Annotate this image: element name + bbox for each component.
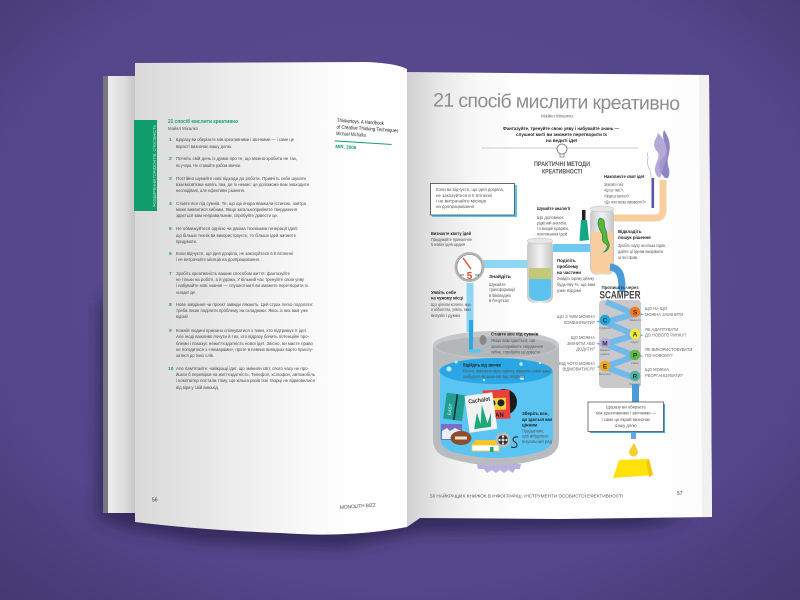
label: quota [431,231,473,247]
label: inspiration: в Вікіпедіях [489,293,512,298]
left page heading: Майкл Міхалко [168,125,198,132]
SCAMPER questions: left side: ДОДАТИ? [576,346,596,352]
text block: ten numbered tips: 1 [169,137,172,143]
subheading [534,162,590,176]
text block: ten numbered tips: і набувайте нові знання — слушної миті ви зможете перетворити їх [176,282,308,289]
icon: Cachalot book: Cachalot [468,397,491,406]
book reference block: MIR, 2006 [335,144,357,151]
icon: red poster: MAN [490,413,504,419]
SCAMPER letter: S: Замінити [629,318,641,322]
text block: ten numbered tips: блеми і показує нежиттєздатність нової ідеї. Звісно, ви маєте право [176,341,313,347]
SCAMPER letter: M [600,338,611,356]
label: find the solution [618,229,666,260]
icon: pressure gauge: 5 [467,271,473,282]
footer: MONOLITH BIZZ: MONOLITH BIZZ [340,502,376,511]
label: divide the problem: на частини [557,270,581,275]
SCAMPER letter: P [630,350,640,365]
SCAMPER questions: left side: ВІД ЧОГО МОЖНА [559,361,595,366]
test tube: divided problem [527,238,553,303]
text block: ten numbered tips: Почніть свій день із думки про те, що можна зробити не так, [176,155,297,162]
SCAMPER questions: right side: ЩО НА ЩО [645,306,667,311]
SCAMPER questions: right side: ЯК ВИКОРИСТОВУВАТИ [645,347,692,352]
text block: ten numbered tips: 9 [169,328,172,334]
label: question everything: Ставте все під сумнів [491,332,539,336]
SCAMPER questions: right side: ПО-НОВОМУ? [645,353,673,358]
label: seek analogies: Шукайте аналогії [537,206,571,211]
text block: ten numbered tips: 5 [169,226,172,232]
label: nurture ideas: «До чого може призвести?» [604,200,647,204]
SCAMPER questions: left side: ЩО МОЖНА [571,335,595,340]
SCAMPER letter: R: Реорган. [629,382,641,386]
SCAMPER letter: S [629,307,641,322]
label: imagine other place: в аббатства, уявіть, яких [431,307,472,312]
SCAMPER questions: left side [557,314,596,372]
panel: green chapter tab: РОЗШИРЕННЯ ГОРИЗОНТІВ: СПОСІБНІСТЬ [152,125,157,207]
label: question everything: хибне, спробуйте це довести [491,350,541,354]
label: collect everything valuable: Придатним, [522,428,544,434]
label: divide the problem: будь-яку %, що вам [557,282,595,287]
text block: ten numbered tips: від віри у свій винахід. [176,384,219,391]
label: divide the problem: уже відомі [557,288,581,293]
left page heading [168,118,239,132]
SCAMPER letter: P: Ужити [631,361,639,365]
text block: ten numbered tips: Не обмежуйтеся однією чи двома техніками генерації ідей: [176,225,298,232]
SCAMPER questions: right side: МОЖНА ЗАМІНИТИ [645,312,683,317]
label: inspiration: в ґенутках [489,298,510,303]
callout: when idea is ripe: Коли ви відчуєте, що ідея дозріла, [436,187,504,192]
SCAMPER letter: A: Адапт. [631,340,639,344]
SCAMPER letter: E: E [603,364,608,370]
lead statement: на ведиті ідеї [546,138,578,144]
text block: ten numbered tips: на ведиті ідеї. [176,290,196,296]
label: collect everything valuable: що здається вам [522,417,552,422]
divider with lightbulb icon [482,144,638,157]
icon: glue tube [580,210,589,241]
label: break the habit: Почніть змінювати якусь навичку, відкрийте новий жанр, [463,368,551,374]
SCAMPER letter: E: Вилучити [599,372,612,376]
label: find the solution: Відкладіть [618,229,642,234]
SCAMPER questions: left side: ВІДМОВИТИСЯ? [562,366,596,372]
SCAMPER questions: right side: РЕОРГАНІЗУВАТИ? [645,373,684,378]
blue pipes [470,248,591,348]
label: break the habit: Відійдіть від звички [463,362,501,368]
text block: ten numbered tips: не тільки на роботі, а й удома. У вільний час тренуйте свою уяву [176,276,304,283]
text block: ten numbered tips: Нове завдання чи проект завжди лякають. Цей страх легко подолати: [176,301,313,308]
text block: ten numbered tips: Постійно шукайте нові підходи до роботи. Привчіть себе шукати [176,175,306,182]
callout: every time you choose [588,402,665,433]
SCAMPER letter: P: P [633,352,638,360]
book reference block: Thinkertoys. A Handbook [337,118,384,127]
title: 21 спосіб мислити креативно [433,90,680,115]
lead statement: слушної миті ви зможете перетворити їх [516,132,607,138]
text block: ten numbered tips: хатися до їхніх слів. [176,353,214,359]
lead statement: Фантазуйте, тренуйте свою уяву і набувайте знань — [503,125,619,132]
label: divide the problem: Знайдіть окрему ділянку [557,276,595,281]
text block: ten numbered tips: вкрасті визначає вашу долю. [176,144,232,150]
icon: green book: EAST [447,403,453,416]
SCAMPER questions: right side: ДО НОВОГО РИНКУ? [645,332,687,338]
icon: film reel [496,432,518,448]
callout: when idea is ripe: і не витрачайте місяців [436,198,487,204]
subheading: ПРАКТИЧНІ МЕТОДИ [534,162,590,168]
scamper cylinder: SCAMPER [600,290,641,302]
label: quota: Придумайте Криналічне [431,237,473,242]
text block: ten numbered tips: Кожній людині приємно спілкуватися з тими, хто підтримує її ідеї. [176,327,307,334]
label: collect everything valuable: щоб вибудувати [522,434,549,438]
callout: every time you choose: вашу долю [615,423,637,428]
label: collect everything valuable [522,411,553,444]
label: nurture ideas: Запитайте себе: [604,182,624,187]
text block: ten numbered tips: Але пам'ятайте: найкращі ідеї, що змінили світ, свого часу не про- [176,365,309,372]
page number 57: 57 [677,491,683,497]
SCAMPER questions: right side [645,306,692,378]
author: Майкл Міхалко [541,112,573,118]
callout: when idea is ripe: не закохуйтеся в її втіленні [436,193,492,198]
text block: ten numbered tips: взаємозв'язки навіть там, де їх немає: це допоможе вам знаходити [176,182,309,188]
book reference block [334,118,399,154]
page number 56: 56 [152,498,158,504]
icon: pressure gauge [454,252,484,282]
text block: ten numbered tips: йшли б перевірки на життєздатність. Телефон, ксілофон, автомобіль [176,371,315,378]
text block: ten numbered tips: треба лише поділити проблему на складники. Якісь із них вам уже [176,308,308,314]
label: divide the problem [557,258,595,293]
text block: ten numbered tips: і комп'ютер постали тому, що кілька разів їхні творці не відмовилися [176,378,315,384]
label: seek analogies: покликання ідей [537,232,568,236]
text block: ten numbered tips: відомі! [176,314,188,320]
panel: green chapter tab [134,120,157,211]
SCAMPER letter: C: Сумісити [599,326,611,330]
icon: yellow book [472,440,500,452]
SCAMPER questions: left side: ЗМІНИТИ АБО [567,341,595,346]
label: imagine other place: Уявіть себе [431,290,457,295]
lead statement [503,125,619,144]
text block: ten numbered tips: 7 [169,271,172,277]
label: imagine other place: на чужому місці [431,296,463,300]
icon: green book [443,393,466,421]
label: collect everything valuable: Зберіть все, [522,411,549,416]
blue pipe from SCAMPER to callout [632,384,639,404]
text block: ten numbered tips: 4 [169,201,172,207]
label: inspiration: Знайдіть [489,274,511,279]
book reference block: Michael Michalko [336,131,366,139]
SCAMPER questions: right side: ЩО МОЖНА [645,367,669,372]
pot: big cauldron [433,320,559,466]
text block: ten numbered tips: Ставте все під сумнів. Те, що ще вчора вважали істиною, завтра [176,201,306,207]
book: open magazine pages [103,62,712,535]
SCAMPER letter: A: A [633,332,638,338]
SCAMPER letter: M: Змінити [600,348,611,352]
book shadow [98,300,690,548]
subheading: КРЕАТИВНОСТІ [542,170,582,176]
SCAMPER letter: E [599,361,612,376]
icon: purple gear under pot [477,464,521,473]
label: collect everything valuable: візуальний ряд [522,439,553,444]
label: break the habit: набудьте враження від творчих [463,374,526,379]
text block: ten numbered tips: 6 [169,251,172,257]
icon: red poster [483,390,511,419]
text block: ten numbered tips: 8 [169,302,172,308]
label: find the solution: дайте ці ідеям визрівати [618,249,664,254]
label: find the solution: Зробіть паузу на кілька годин, [618,243,666,248]
label: find the solution: за їхні справи. [618,255,638,260]
icon: football [450,431,472,445]
text block: ten numbered tips: придумати. [176,240,197,245]
scamper cylinder: Пропишіть через [601,285,639,290]
scamper cylinder [599,285,641,388]
SCAMPER questions: left side: ЩО З ЧИМ МОЖНА [557,314,595,319]
test tube with lizard [590,206,614,275]
SCAMPER letter: C [599,315,611,330]
SCAMPER letter: S: S [633,310,638,316]
label: nurture ideas: «Звідки це взялося?», [604,194,630,198]
left page heading: 21 спосіб мислити креативно [168,118,239,125]
label: imagine other place [431,290,472,318]
SCAMPER letter: R [629,371,641,386]
SCAMPER letter: C: C [603,318,608,324]
text block: ten numbered tips [168,137,315,391]
label: inspiration: трансформації [489,287,516,292]
footer: book series line: 50 НАЙКРАЩИХ КНИЖОК В ІНФОГРАФІЦІ. ІНСТРУМЕНТИ ОСОБИСТОЇ ЕФЕКТИВНОСТІ [430,492,623,498]
SCAMPER questions: right side: ЯК АДАПТУВАТИ [645,327,678,332]
label: divide the problem: Поділіть [557,258,576,263]
text block: ten numbered tips: Зробіть креативність вашим способом життя: фантазуйте [176,270,290,277]
book reference block: of Creative Thinking Techniques [336,124,399,134]
SCAMPER letter: A [630,329,640,344]
orange pipe and smoke [612,130,670,218]
label: quota: Визначте квоту ідей [431,231,471,236]
label: quota: 5 нових ідей щодня [431,242,465,247]
text block: ten numbered tips: 3 [169,176,172,182]
text block: ten numbered tips: несподівані, але ефективні рішення. [176,188,245,194]
text block: ten numbered tips: 2 [169,156,172,162]
label: inspiration: Шукайте [489,282,506,287]
callout: when idea is ripe [430,184,517,217]
label: imagine other place: Що цілком колеги, жук [431,302,471,307]
SCAMPER letter: M: M [602,340,608,348]
label: inspiration [489,274,516,303]
text block: ten numbered tips: і не витрачайте місяців на доопрацювання. [176,256,260,263]
icon: Cachalot book [464,392,497,433]
text block: ten numbered tips: як учора. Не ставайте рабом звички. [176,162,241,169]
icon: vinyl record [491,389,517,415]
text block: ten numbered tips: може виявитися хибним. Якщо загальноприйняте твердження [176,206,297,213]
label: seek analogies: та вищий ієрархію, [537,226,569,231]
text block: ten numbered tips: Але іноді важливо почути й тих, хто відразу бачить потенційні про- [176,333,309,340]
label: nurture ideas: «Що це таке?», [604,188,624,192]
text block: ten numbered tips: що більше технік ви використовуєте, то більше ідей зможете [176,232,296,239]
label: imagine other place: вигуків і думки [431,313,461,318]
callout: every time you choose: Щоразу ви обираєте [606,404,647,410]
text block: ten numbered tips: 10 [168,366,174,372]
label: break the habit [463,362,551,379]
icon: gold drop and ingot [613,433,653,478]
callout: every time you choose: між креативними і звичними — [596,410,657,416]
callout: every time you choose: і саме це вкрай визначає [602,417,651,422]
text block: ten numbered tips: не погодитися з «немарами», проте в певних випадках варто прислу- [176,348,313,353]
text block: ten numbered tips: Щоразу ви оберіаєте між креативними і звичними — і саме це [176,137,294,143]
text block: ten numbered tips: Коли відчуєте, що ідея дозріла, не закохуйтеся в її втіленні [176,250,293,257]
label: find the solution: пошук рішення [618,235,651,240]
label: seek analogies: Що доповнює [537,215,564,220]
label: seek analogies [537,206,571,236]
icon: purple photo card [441,424,462,440]
SCAMPER letter: R: R [633,374,638,380]
text block: ten numbered tips: здається вам неправильним, спробуйте довести це. [176,212,278,219]
SCAMPER letter: M: додати [600,352,610,356]
label: question everything: загальноприйняте твердження [491,344,543,349]
label: collect everything valuable: цінним [522,422,537,428]
curved blue pipe to SCAMPER [610,267,622,292]
icon: lizard [598,218,609,252]
callout: when idea is ripe: на доопрацювання [436,204,474,209]
label: nurture ideas: Накопичте свої ідеї [604,174,645,179]
label: nurture ideas [604,174,647,204]
label: question everything: Якщо вам здається, що [491,338,536,343]
SCAMPER questions: left side: КОМБІНУВАТИ? [564,320,596,325]
label: seek analogies: рідкісний аналогів, [537,220,567,226]
label: question everything [491,332,543,354]
label: divide the problem: проблему [557,264,579,269]
